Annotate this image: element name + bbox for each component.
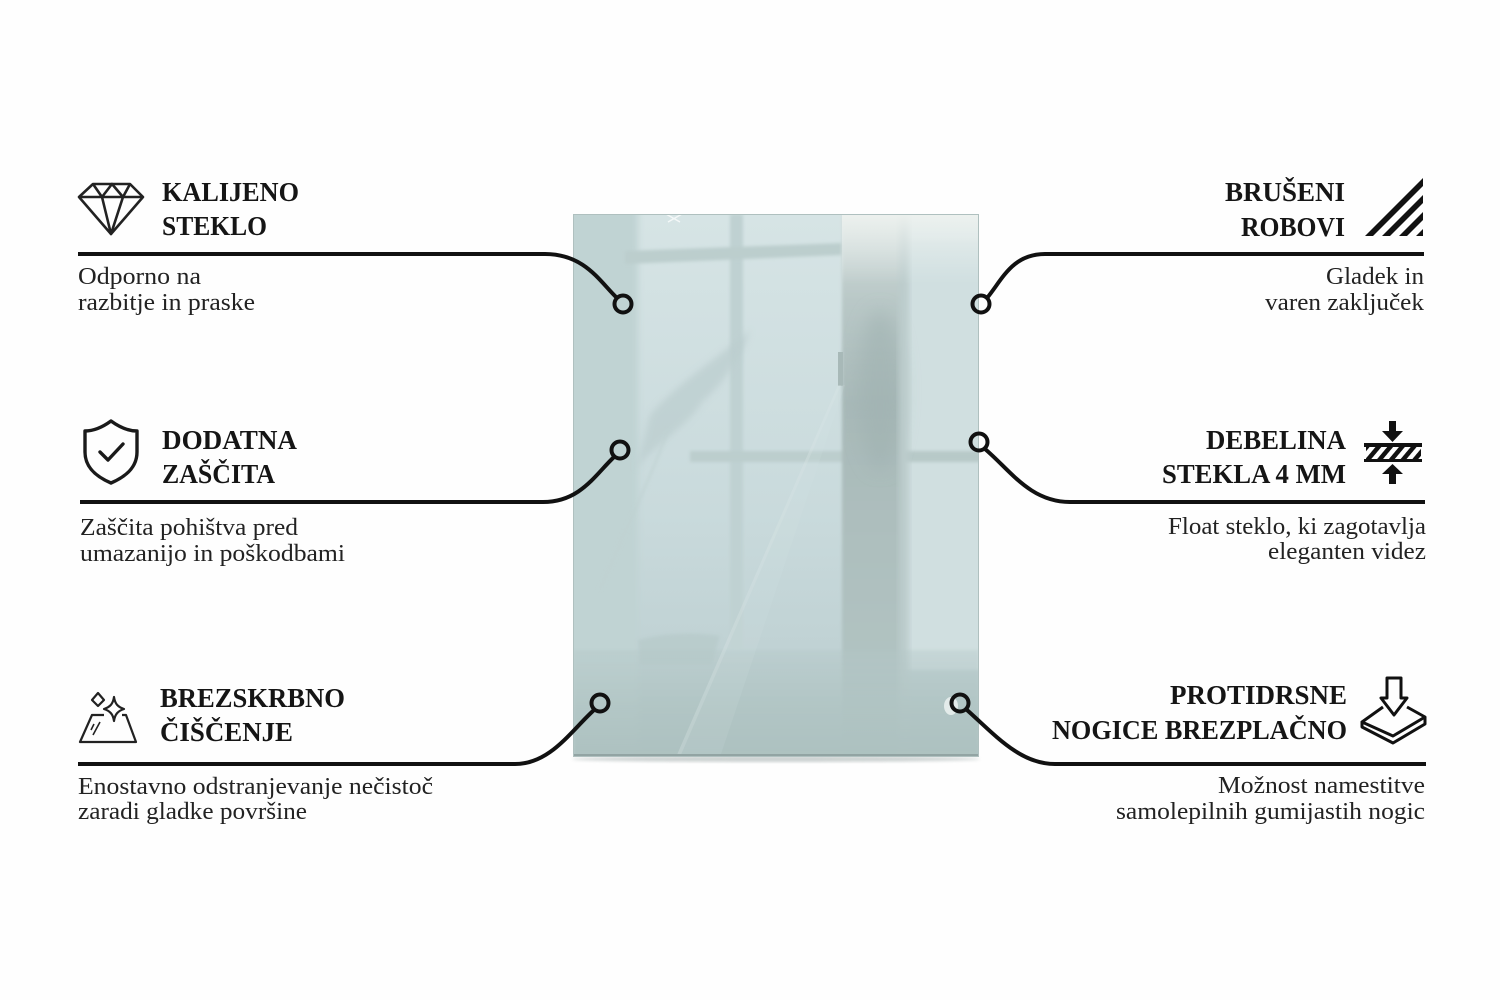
text: kaljeno steklo description: Odporno na: [78, 264, 201, 290]
text: debelina stekla description: Float steklo, ki zagotavlja: [1168, 514, 1426, 540]
leader line: dodatna zaščita: [80, 442, 628, 502]
panel: glass plate: [560, 200, 984, 770]
heading: debelina stekla 4 mm: STEKLA 4 MM: [1162, 458, 1346, 489]
heading: kaljeno steklo: [162, 176, 299, 241]
leader line: debelina stekla: [970, 434, 1425, 502]
text: protidrsne nogice description: Možnost namestitve: [1218, 773, 1425, 799]
icon: sparkling surface: [80, 693, 136, 742]
heading: brezskrbno čiščenje: ČIŠČENJE: [160, 716, 293, 747]
text: kaljeno steklo description: razbitje in praske: [78, 290, 255, 316]
text: brezskrbno čiščenje description: Enostavno odstranjevanje nečistoč: [78, 774, 433, 800]
text: brušeni robovi description: varen zaključek: [1265, 290, 1424, 316]
text: brušeni robovi description: [1265, 264, 1424, 316]
text: kaljeno steklo description: [78, 264, 255, 316]
heading: kaljeno steklo: STEKLO: [162, 210, 267, 241]
text: protidrsne nogice description: samolepilnih gumijastih nogic: [1116, 799, 1425, 825]
icon: glass thickness: [1364, 421, 1422, 484]
text: dodatna zaščita description: umazanijo in poškodbami: [80, 541, 345, 567]
icon: shield with check: [85, 421, 137, 483]
text: dodatna zaščita description: [80, 515, 345, 567]
heading: dodatna zaščita: DODATNA: [162, 424, 297, 455]
heading: debelina stekla 4 mm: [1162, 424, 1346, 489]
heading: protidrsne nogice brezplačno: PROTIDRSNE: [1170, 679, 1347, 710]
heading: brezskrbno čiščenje: BREZSKRBNO: [160, 682, 345, 713]
text: brezskrbno čiščenje description: [78, 774, 433, 825]
icon: anti-slip feet: [1362, 678, 1425, 743]
leader line: brezskrbno čiščenje: [78, 694, 608, 764]
heading: debelina stekla 4 mm: DEBELINA: [1206, 424, 1346, 455]
text: debelina stekla description: eleganten videz: [1268, 539, 1426, 565]
heading: protidrsne nogice brezplačno: NOGICE BREZPLAČNO: [1052, 714, 1347, 745]
heading: protidrsne nogice brezplačno: [1052, 679, 1347, 745]
text: dodatna zaščita description: Zaščita pohištva pred: [80, 515, 298, 541]
text: debelina stekla description: [1168, 514, 1426, 565]
icon: diamond: [79, 184, 143, 234]
heading: dodatna zaščita: [162, 424, 297, 489]
text: protidrsne nogice description: [1116, 773, 1425, 825]
icon: polished edge stripes: [1365, 178, 1423, 236]
text: brezskrbno čiščenje description: zaradi gladke površine: [78, 799, 307, 825]
heading: dodatna zaščita: ZAŠČITA: [162, 458, 275, 489]
text: brušeni robovi description: Gladek in: [1326, 264, 1424, 290]
heading: brušeni robovi: ROBOVI: [1241, 211, 1345, 242]
heading: kaljeno steklo: KALIJENO: [162, 176, 299, 207]
leader line: kaljeno steklo: [78, 254, 632, 312]
heading: brušeni robovi: BRUŠENI: [1225, 176, 1345, 207]
leader line: protidrsne nogice: [952, 694, 1426, 764]
heading: brušeni robovi: [1225, 176, 1345, 242]
leader line: brušeni robovi: [972, 254, 1424, 312]
heading: brezskrbno čiščenje: [160, 682, 345, 747]
